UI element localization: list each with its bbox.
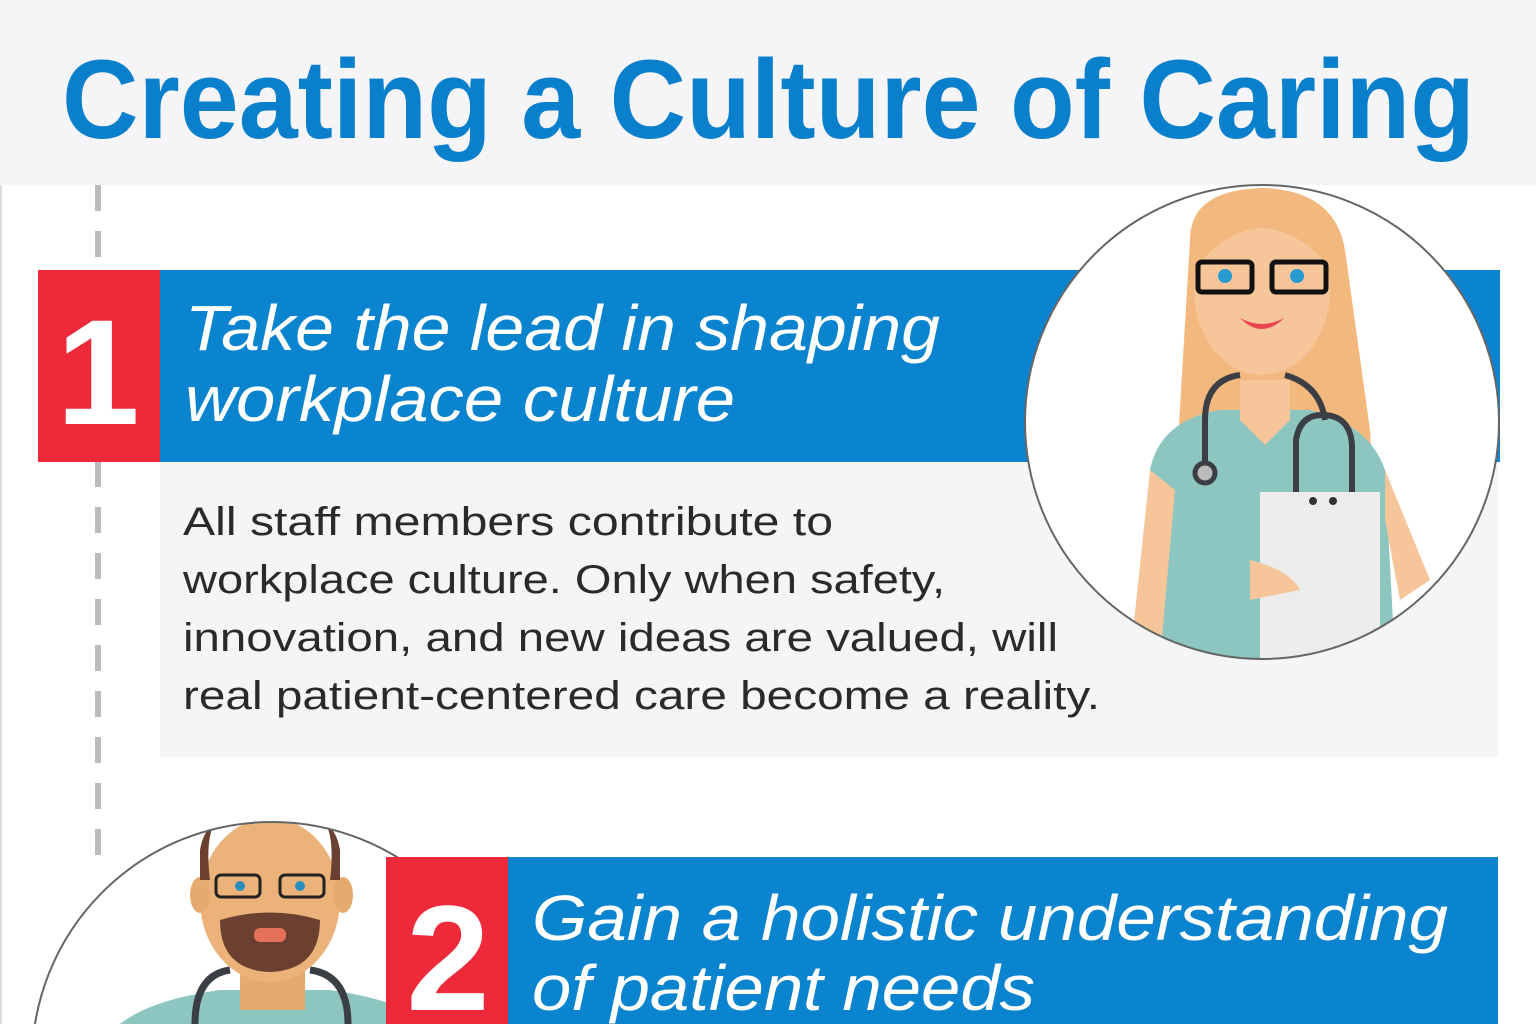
number badge 1: 1	[56, 288, 140, 456]
body text 1: innovation, and new ideas are valued, will	[183, 616, 1058, 660]
body text 1	[160, 462, 1498, 757]
number badge 1	[38, 270, 160, 462]
number badge 2	[386, 857, 508, 1024]
body text 1: workplace culture. Only when safety,	[182, 558, 945, 602]
heading bar 1: Take the lead in shaping	[185, 292, 940, 364]
heading bar 1	[160, 270, 1500, 462]
panel 2	[32, 818, 1498, 1024]
illustration: doctor	[34, 821, 399, 1024]
illustration: nurse	[1025, 185, 1499, 662]
panel 1	[38, 185, 1500, 757]
title: Creating a Culture of Caring	[62, 37, 1475, 162]
heading bar 2: of patient needs	[532, 952, 1035, 1024]
heading bar 2: Gain a holistic understanding	[532, 882, 1448, 954]
body text 1: real patient-centered care become a reality.	[183, 674, 1100, 718]
body text 1: All staff members contribute to	[183, 500, 833, 544]
heading bar 2	[508, 857, 1498, 1024]
header band	[0, 0, 1536, 185]
heading bar 1: workplace culture	[185, 363, 735, 435]
